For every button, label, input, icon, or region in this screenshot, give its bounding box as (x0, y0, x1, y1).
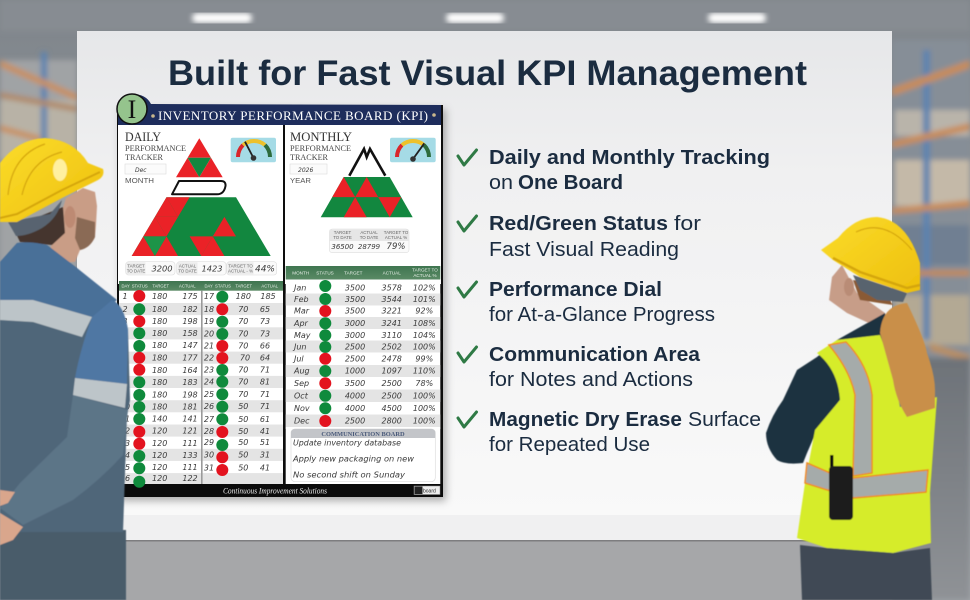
feature: performance dial (458, 279, 715, 326)
daily values days 1-16: 164 (182, 366, 198, 375)
daily values days 1-16: 3 (122, 317, 128, 326)
hair under helmet (853, 280, 893, 305)
monthly table: 100% (413, 342, 436, 352)
daily values days 1-16: 180 (152, 366, 167, 375)
monthly table: Oct (294, 392, 309, 400)
daily values days 1-16: 133 (182, 451, 198, 460)
hard hat (0, 138, 103, 222)
communication board: COMMUNICATION BOARD (321, 431, 405, 438)
monthly table: Aug (293, 367, 310, 376)
monthly table: ACTUAL % (413, 273, 437, 278)
monthly table: 2500 (345, 417, 365, 426)
daily values days 17-31: 31 (260, 450, 270, 460)
daily table: TARGET (152, 284, 169, 288)
monthly tracker heading: PERFORMANCE (290, 144, 351, 153)
monthly table: 3500 (345, 284, 365, 292)
monthly table: Nov (294, 404, 310, 413)
daily values days 17-31: 185 (260, 292, 276, 301)
monthly table: Feb (294, 295, 309, 304)
daily values days 17-31: 41 (260, 427, 270, 436)
feature: magnetic dry erase surface: for Repeated Use (489, 434, 650, 456)
daily tracker heading: DAILY (125, 130, 161, 144)
monthly table: 2500 (382, 379, 402, 388)
daily table: STATUS (215, 284, 231, 288)
feature: magnetic dry erase surface (458, 409, 761, 456)
daily values days 17-31: 17 (204, 292, 215, 301)
daily values days 17-31: 70 (240, 354, 250, 362)
helmet liner (853, 275, 907, 302)
daily values days 1-16: 198 (182, 317, 198, 326)
daily values days 1-16: 122 (182, 474, 198, 483)
daily values days 17-31: 20 (204, 330, 214, 338)
daily values days 1-16: 111 (182, 463, 198, 472)
feature list (458, 147, 770, 456)
monthly table: 2502 (382, 342, 402, 352)
daily table: ACTUAL (179, 284, 196, 288)
feature: daily and monthly tracking: One Board (518, 172, 623, 194)
monthly summary stats: TARGET (334, 230, 352, 235)
daily values days 1-16: 14 (120, 451, 130, 460)
daily values days 17-31: 27 (204, 415, 215, 424)
daily values days 1-16: 158 (182, 329, 198, 338)
daily values days 17-31: 70 (238, 305, 248, 314)
daily values days 17-31: 28 (204, 427, 214, 436)
sleeve reflective stripe (73, 378, 127, 408)
feature: red/green status: Red/Green Status (489, 213, 668, 235)
monthly table: Jun (292, 342, 306, 352)
monthly table: Jan (292, 284, 306, 292)
board header: INVENTORY PERFORMANCE BOARD (KPI) (158, 108, 428, 123)
beard (75, 217, 95, 250)
monthly table: 1000 (345, 367, 365, 376)
daily values days 1-16: 180 (152, 378, 167, 387)
pants (800, 545, 932, 600)
daily values days 1-16: 10 (120, 402, 130, 412)
monthly table: 100% (413, 417, 436, 426)
daily values days 17-31: 73 (260, 330, 270, 338)
monthly summary stats: TO DATE (333, 235, 352, 240)
monthly table: 3000 (345, 319, 365, 328)
daily values days 17-31: 23 (204, 366, 214, 374)
monthly table: Sep (294, 379, 309, 388)
daily summary stats: 1423 (201, 264, 223, 274)
ear (844, 278, 854, 296)
daily values days 17-31 (204, 292, 276, 472)
worker on the right (766, 217, 937, 600)
daily values days 17-31: 71 (260, 390, 270, 399)
monthly table: 78% (415, 379, 433, 388)
daily summary stats: ACTUAL (179, 264, 197, 268)
daily values days 17-31: 24 (204, 378, 214, 386)
monthly table: 3578 (382, 284, 402, 292)
daily values days 17-31: 81 (260, 378, 270, 386)
daily tracker heading (125, 130, 186, 185)
ceiling lights (192, 13, 766, 23)
pants (0, 530, 126, 600)
daily tracker heading: Dec (135, 167, 147, 174)
radio (829, 455, 853, 520)
daily values days 17-31: 21 (204, 342, 214, 350)
daily values days 1-16: 177 (182, 354, 199, 362)
monthly summary stats: ACTUAL (360, 230, 378, 235)
monthly summary stats: ACTUAL % (385, 235, 407, 240)
feature: red/green status (458, 213, 701, 261)
daily values days 17-31: 29 (204, 438, 214, 447)
daily values days 17-31: 50 (238, 450, 248, 460)
daily values days 1-16: 11 (120, 414, 130, 424)
monthly table: MONTH (292, 270, 309, 276)
monthly table: 110% (413, 367, 436, 376)
monthly table: TARGET TO (412, 268, 438, 272)
communication board: Apply new packaging on new (292, 455, 414, 464)
daily values days 1-16: 120 (152, 426, 167, 436)
monthly table: 3500 (345, 379, 365, 388)
feature: communication area (458, 344, 701, 391)
daily summary stats: TO DATE (127, 268, 145, 274)
white wall panel (77, 31, 892, 542)
daily values days 17-31: 70 (238, 342, 248, 350)
daily summary stats: 3200 (151, 264, 173, 274)
monthly table: STATUS (316, 270, 334, 276)
monthly table: 1097 (382, 367, 403, 376)
back reflective stripe (0, 300, 92, 337)
shirt collar and arm (766, 313, 890, 464)
daily values days 1-16: 181 (182, 402, 198, 412)
monthly summary stats: 36500 (331, 243, 354, 251)
monthly table: 3110 (382, 331, 402, 340)
vest (797, 335, 937, 553)
monthly table: 99% (415, 354, 433, 364)
feature: performance dial: for At-a-Glance Progress (489, 304, 715, 326)
daily values days 17-31: 70 (238, 330, 248, 338)
daily values days 1-16: 180 (152, 292, 167, 301)
monthly table: TARGET (344, 270, 363, 276)
daily table (119, 281, 283, 485)
monthly table: 3241 (382, 319, 402, 328)
daily tracker heading: MONTH (125, 178, 154, 185)
ear (64, 206, 76, 228)
monthly table: 2478 (382, 354, 402, 364)
daily values days 1-16: 180 (152, 390, 167, 400)
daily summary stats (126, 262, 277, 275)
feature: daily and monthly tracking (458, 147, 770, 194)
daily values days 17-31: 71 (260, 366, 270, 374)
daily table: DAY (122, 284, 130, 288)
daily summary stats: TARGET TO (228, 264, 253, 268)
monthly mountain mark (349, 149, 385, 176)
daily values days 17-31: 70 (238, 366, 248, 374)
monthly table: 2800 (382, 417, 402, 426)
daily values days 1-16: 8 (122, 378, 128, 387)
monthly table: 108% (413, 319, 436, 328)
daily values days 17-31: 31 (204, 464, 214, 472)
daily values days 1-16: 5 (122, 341, 128, 350)
monthly tracker heading: YEAR (290, 178, 311, 185)
daily values days 17-31: 50 (238, 415, 248, 424)
monthly table: 4500 (382, 404, 402, 413)
monthly table: Mar (294, 307, 310, 316)
daily table: DAY (205, 284, 213, 288)
short hair (13, 207, 65, 245)
daily values days 1-16: 141 (182, 414, 198, 424)
daily values days 17-31: 64 (260, 354, 270, 362)
jacket body (0, 242, 130, 532)
feature: magnetic dry erase surface: Magnetic Dry Erase (489, 409, 682, 431)
daily summary stats: ACTUAL - % (228, 268, 253, 274)
monthly table: 2500 (382, 392, 402, 400)
daily values days 17-31: 41 (260, 464, 270, 472)
daily summary stats: 44% (255, 264, 275, 274)
daily values days 1-16: 13 (120, 439, 130, 448)
board header: I (128, 95, 136, 124)
vest vertical stripe (829, 342, 872, 476)
status magnets: daily days 1-16 (133, 290, 145, 488)
daily values days 1-16: 9 (122, 390, 128, 400)
monthly table: 101% (413, 295, 436, 304)
daily values days 1-16: 180 (152, 317, 167, 326)
daily table: ACTUAL (261, 284, 279, 288)
feature: red/green status: Fast Visual Reading (489, 239, 679, 261)
hard hat (821, 217, 920, 293)
upper back yoke (0, 242, 117, 317)
monthly tracker heading (290, 130, 352, 185)
daily summary stats: TO DATE (178, 268, 197, 274)
monthly summary stats: 79% (387, 242, 405, 252)
vest horizontal stripe (805, 463, 928, 498)
helmet liner (8, 200, 62, 236)
monthly table: 3500 (345, 295, 365, 304)
daily values days 1-16: 183 (182, 378, 198, 387)
daily values days 1-16: 111 (182, 439, 198, 448)
daily values days 17-31: 51 (260, 438, 270, 447)
daily values days 1-16: 120 (152, 439, 167, 448)
daily values days 1-16: 180 (152, 354, 167, 362)
monthly performance dial (390, 138, 436, 162)
monthly tracker heading: 2026 (298, 167, 313, 174)
monthly table: Jul (292, 354, 304, 364)
worker on the left (0, 138, 130, 600)
monthly table: 4000 (345, 404, 365, 413)
monthly table: 100% (413, 392, 436, 400)
monthly table: Apr (293, 319, 309, 328)
daily summary stats: TARGET (127, 264, 145, 268)
feature: communication area: Communication Area (489, 344, 701, 366)
daily values days 1-16: 180 (152, 402, 167, 412)
communication board: No second shift on Sunday (293, 470, 405, 479)
feature: daily and monthly tracking: Daily and Monthly Tracking (489, 147, 770, 169)
daily values days 17-31: 19 (204, 317, 214, 326)
status magnets: daily days 17-31 (216, 291, 228, 476)
monthly table: 3500 (345, 307, 365, 316)
monthly table: 100% (413, 404, 436, 413)
daily values days 1-16: 175 (182, 292, 198, 301)
daily values days 17-31: 25 (204, 390, 214, 399)
daily tracker heading: TRACKER (125, 153, 164, 162)
daily values days 1-16: 120 (152, 463, 167, 472)
monthly table: 4000 (345, 392, 365, 400)
monthly table: 3544 (382, 295, 402, 304)
daily values days 1-16: 140 (152, 414, 167, 424)
monthly table: 2500 (345, 354, 365, 364)
daily values days 1-16: 7 (122, 366, 128, 375)
daily middle shape (172, 181, 226, 194)
monthly summary stats (329, 229, 409, 253)
monthly table: 102% (413, 284, 436, 292)
daily values days 1-16: 4 (122, 329, 128, 338)
neck and face (50, 188, 97, 262)
daily tracker heading: PERFORMANCE (125, 144, 186, 153)
feature: daily and monthly tracking: on (489, 172, 513, 194)
daily values days 17-31: 180 (236, 292, 251, 301)
title: Built for Fast Visual KPI Management (168, 54, 807, 93)
daily values days 17-31: 26 (204, 402, 214, 411)
daily values days 1-16: 180 (152, 305, 167, 314)
daily values days 1-16 (120, 292, 199, 483)
daily values days 17-31: 61 (260, 415, 270, 424)
daily values days 1-16: 12 (120, 426, 130, 436)
floor (77, 541, 892, 600)
feature: communication area: for Notes and Actions (489, 369, 693, 391)
daily values days 17-31: 70 (238, 317, 248, 326)
monthly summary stats: TO DATE (360, 235, 378, 240)
daily top triangle (176, 138, 223, 177)
feature: magnetic dry erase surface: Surface (688, 409, 761, 431)
monthly tracker heading: MONTHLY (290, 130, 352, 144)
daily values days 17-31: 65 (260, 305, 270, 314)
daily values days 1-16: 182 (182, 305, 198, 314)
daily values days 1-16: 121 (182, 426, 198, 436)
daily values days 17-31: 50 (238, 438, 248, 447)
daily values days 17-31: 50 (238, 427, 248, 436)
board footer: board (423, 488, 436, 494)
board footer: Continuous Improvement Solutions (223, 486, 327, 496)
daily values days 1-16: 180 (152, 341, 167, 350)
monthly table: 92% (415, 307, 433, 316)
daily values days 1-16: 147 (182, 341, 199, 350)
ponytail (880, 303, 935, 417)
daily values days 17-31: 66 (260, 342, 270, 350)
daily values days 1-16: 198 (182, 390, 198, 400)
daily values days 1-16: 120 (152, 474, 167, 483)
daily values days 17-31: 22 (204, 354, 214, 362)
feature: performance dial: Performance Dial (489, 279, 662, 301)
face and neck (829, 265, 885, 325)
daily values days 1-16: 180 (152, 329, 167, 338)
monthly pyramid (321, 177, 413, 217)
daily values days 17-31: 50 (238, 402, 248, 411)
monthly table: Dec (294, 417, 310, 426)
daily values days 17-31: 18 (204, 305, 214, 314)
monthly table: ACTUAL (383, 270, 401, 276)
monthly table (286, 266, 440, 429)
communication board: Update inventory database (293, 439, 401, 448)
daily performance dial (231, 138, 276, 162)
daily values days 1-16: 2 (122, 305, 128, 314)
daily table: TARGET (235, 284, 252, 288)
monthly table: 104% (413, 331, 436, 340)
daily values days 17-31: 70 (238, 390, 248, 399)
daily values days 1-16: 6 (122, 354, 128, 362)
monthly summary stats: 28799 (358, 243, 381, 251)
status magnets: monthly (319, 280, 331, 427)
inventory performance board (117, 94, 443, 497)
daily values days 1-16: 120 (152, 451, 167, 460)
communication board (286, 427, 440, 484)
upper sleeve (75, 300, 128, 384)
monthly table: 2500 (345, 342, 365, 352)
daily values days 1-16: 1 (122, 292, 128, 301)
board footer (118, 484, 443, 497)
daily values days 1-16: 15 (120, 463, 130, 472)
monthly table: May (294, 331, 311, 340)
daily values days 17-31: 50 (238, 464, 248, 472)
daily values days 17-31: 73 (260, 317, 270, 326)
daily base pyramid (132, 197, 271, 256)
monthly table: 3000 (345, 331, 365, 340)
daily values days 1-16: 16 (120, 474, 130, 483)
daily table: STATUS (132, 284, 148, 288)
monthly table: 3221 (382, 307, 402, 316)
board header (117, 94, 441, 125)
monthly tracker heading: TRACKER (290, 153, 329, 162)
hands (0, 490, 23, 545)
daily values days 17-31: 70 (238, 378, 248, 386)
monthly summary stats: TARGET TO (384, 230, 409, 235)
feature: red/green status: for (674, 213, 701, 235)
daily values days 17-31: 30 (204, 450, 214, 460)
daily values days 17-31: 71 (260, 402, 270, 411)
forearm (0, 395, 128, 525)
